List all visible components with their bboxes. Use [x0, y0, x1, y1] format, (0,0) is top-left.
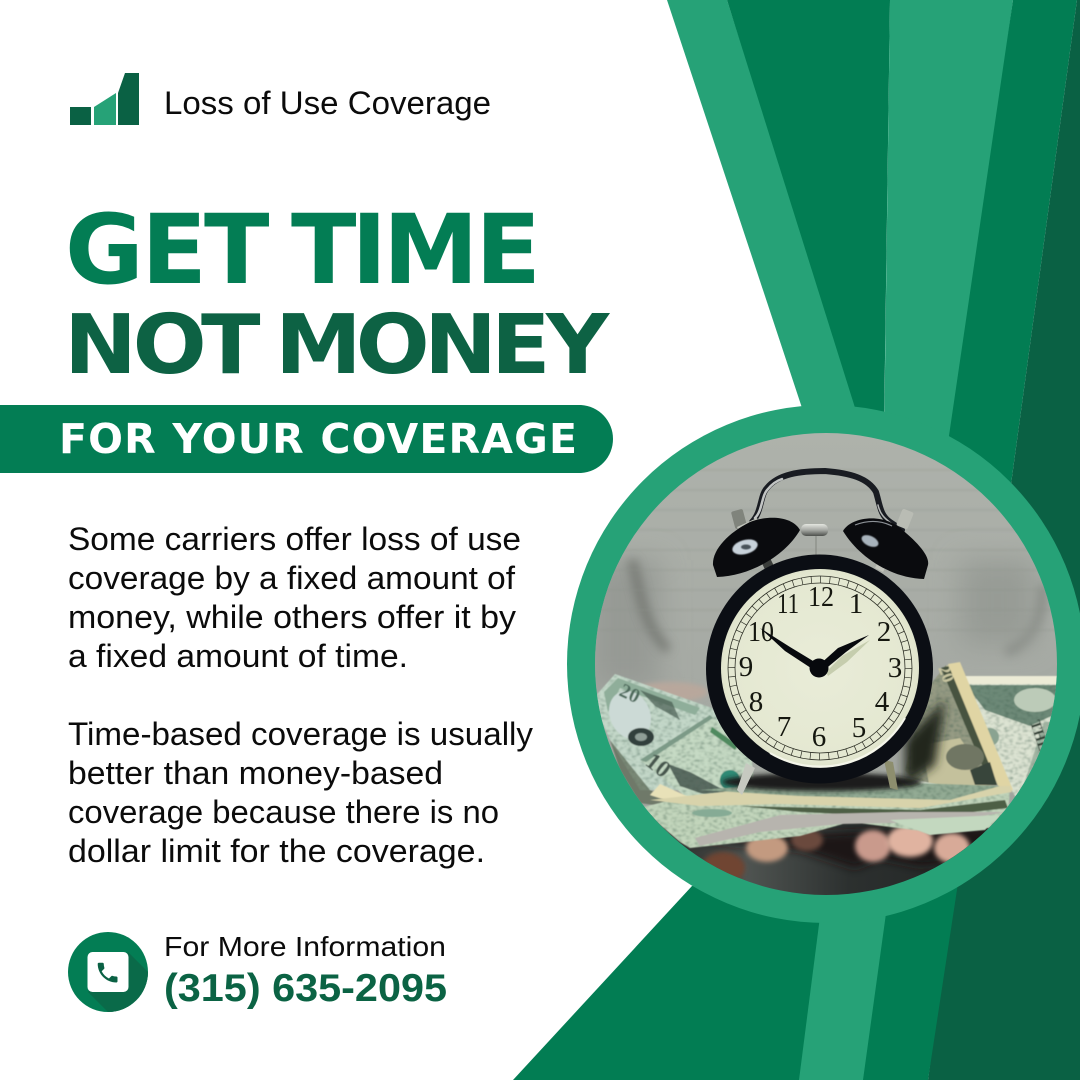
clock numerals: 3: [888, 652, 902, 684]
minute track: [728, 576, 912, 760]
clock numerals: 9: [739, 651, 753, 683]
clock numerals: 2: [877, 616, 891, 648]
text block: carriers explanation: [68, 521, 521, 674]
clock numerals: 4: [875, 686, 890, 718]
clock numerals: 7: [777, 711, 791, 743]
title: GET TIME: [65, 194, 541, 306]
text block: carriers explanation: Some carriers offer loss of use: [68, 521, 521, 557]
clock numerals: 8: [749, 686, 763, 718]
photo: alarm clock on banknotes: [590, 428, 1070, 905]
banknotes: left fan: 10: [640, 748, 675, 784]
banknotes: left fan: [597, 674, 754, 805]
icon: bar chart logo: [70, 73, 139, 125]
subtitle banner: [0, 405, 613, 473]
left bell: [713, 518, 800, 577]
title: NOT MONEY: [64, 296, 611, 392]
subtitle banner: FOR YOUR COVERAGE: [59, 415, 577, 463]
banknotes: right fan: THE UNITED: [1026, 718, 1070, 813]
icon: phone badge: [68, 932, 148, 1012]
clock body: [706, 554, 933, 784]
clock numerals: 6: [812, 721, 826, 753]
clock feet: [737, 760, 898, 795]
banknotes: right fan: [896, 662, 1057, 796]
contact text: (315) 635-2095: [164, 967, 447, 1010]
title: [64, 194, 611, 392]
clock: [706, 471, 933, 795]
clock face: [721, 569, 919, 767]
contact text: For More Information: [164, 931, 446, 962]
contact text: [164, 931, 447, 1010]
photo lower shadow and hands: [651, 815, 1001, 895]
clock numerals: 5: [852, 712, 866, 744]
clock numerals: 12: [808, 581, 834, 613]
text block: carriers explanation: a fixed amount of time.: [68, 638, 408, 674]
alarm knobs: [731, 509, 914, 529]
banknotes: left fan: 20: [616, 680, 643, 708]
right bell: [843, 518, 928, 579]
bell posts and hammer: [757, 524, 892, 572]
clock numerals: 11: [777, 588, 799, 620]
clock hands: [760, 628, 870, 678]
background: green curtain shapes: [513, 0, 1080, 1080]
text block: carriers explanation: coverage by a fixed amount of: [68, 560, 515, 596]
clock numerals: 10: [748, 616, 774, 648]
banknotes: right fan: 20: [934, 662, 958, 685]
photo ring: [567, 405, 1080, 923]
text block: carriers explanation: money, while others offer it by: [68, 599, 516, 635]
text block: time-based advantage: better than money-based: [68, 755, 443, 791]
text block: time-based advantage: Time-based coverage is usually: [68, 716, 533, 752]
handle: [752, 471, 902, 530]
text block: time-based advantage: dollar limit for the coverage.: [68, 833, 485, 869]
text block: time-based advantage: [68, 716, 533, 869]
clock numerals: [739, 581, 902, 753]
clock numerals: 1: [849, 588, 863, 620]
header label: Loss of Use Coverage: [164, 85, 491, 121]
photo backdrop: grey sweater: [590, 428, 1062, 828]
clock shadow: [722, 700, 945, 791]
banknotes: front stack: [640, 780, 1012, 848]
text block: time-based advantage: coverage because there is no: [68, 794, 499, 830]
